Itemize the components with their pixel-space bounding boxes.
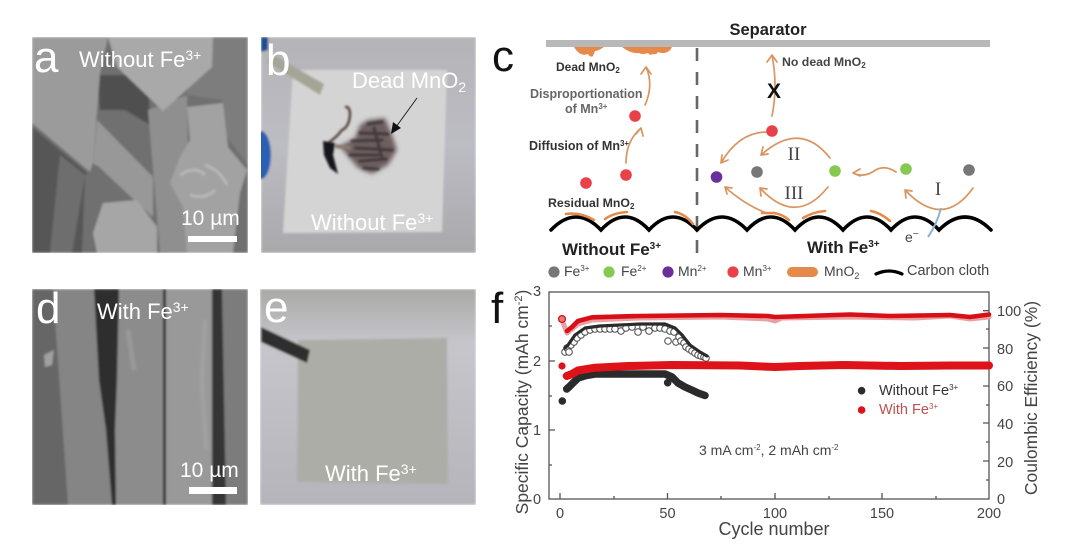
caption a: 3+	[185, 47, 201, 63]
roman numerals: III	[785, 183, 803, 204]
test conditions: 3 mA cm	[699, 442, 753, 458]
caption d: 3+	[173, 299, 189, 315]
test conditions: -2	[753, 443, 761, 452]
roman numerals: II	[788, 144, 800, 165]
right axis ticks: 60	[997, 379, 1013, 395]
arrow to dead MnO2	[391, 98, 417, 134]
series: coulombic efficiency with Fe3+	[559, 314, 989, 333]
chart legend: 3+	[949, 383, 959, 392]
chart legend: 3+	[929, 402, 938, 411]
x axis title: Cycle number	[718, 519, 830, 539]
legend: Mn	[743, 263, 762, 279]
left axis title: -2	[513, 295, 525, 305]
legend: Fe	[564, 263, 580, 279]
label f: f	[491, 284, 504, 333]
series: capacity with Fe3+	[558, 362, 989, 376]
scale text a: 10 µm	[181, 207, 240, 230]
chart legend	[858, 383, 959, 418]
dead MnO2 deposits	[574, 47, 672, 57]
left axis title: )	[512, 290, 532, 295]
legend: 3+	[580, 264, 590, 273]
caption e: 3+	[401, 461, 417, 477]
x axis ticks: 50	[659, 506, 676, 522]
right axis ticks	[997, 304, 1021, 508]
legend: 2+	[637, 264, 647, 273]
panel c: mechanism schematic	[492, 21, 991, 281]
scale bar d	[189, 487, 237, 494]
right axis ticks: 0	[997, 492, 1005, 508]
text: diffusion: Diffusion of Mn	[529, 139, 620, 153]
chart legend: Without Fe	[879, 383, 949, 399]
label d: d	[36, 284, 60, 333]
label c: c	[492, 32, 514, 81]
right axis ticks: 80	[997, 342, 1013, 358]
x axis ticks	[556, 506, 1001, 522]
roman numerals	[785, 144, 941, 204]
legend: 2	[854, 271, 859, 281]
caption d: With Fe	[97, 299, 173, 324]
text: with Fe: 3+	[868, 239, 880, 250]
test conditions: -2	[831, 443, 839, 452]
legend: 3+	[762, 264, 772, 273]
left axis ticks: 1	[533, 423, 541, 439]
label e: e	[264, 283, 288, 332]
legend: Carbon cloth	[907, 263, 989, 279]
text: no dead: No dead MnO	[782, 55, 861, 69]
caption a: Without Fe	[79, 47, 185, 72]
text: diffusion: 3+	[620, 139, 629, 148]
plot frame and ticks	[549, 292, 989, 499]
panel d: SEM image with Fe3+	[32, 284, 248, 505]
panel b: photo of separator with dead MnO2	[251, 36, 476, 253]
caption e: With Fe	[325, 461, 401, 486]
roman numerals: I	[935, 179, 941, 200]
panel a: SEM image without Fe3+	[32, 33, 248, 253]
text: dead MnO2: 2	[615, 66, 620, 75]
arrows	[626, 55, 973, 212]
carbon cloth	[551, 217, 991, 230]
test conditions: , 2 mAh cm	[761, 442, 831, 458]
separator bar	[546, 40, 990, 47]
x axis ticks: 150	[870, 506, 894, 522]
x axis ticks: 100	[763, 506, 787, 522]
legend: 2+	[697, 264, 707, 273]
right axis ticks: 100	[997, 304, 1021, 320]
text: with Fe: With Fe	[807, 238, 868, 257]
caption dead MnO2: Dead MnO	[352, 68, 458, 93]
x axis ticks: 200	[977, 506, 1001, 522]
x axis ticks: 0	[556, 506, 564, 522]
text: disproportionation: Disproportionation	[530, 87, 642, 101]
ions	[580, 110, 975, 189]
left axis ticks: 2	[533, 354, 541, 370]
series: capacity without Fe3+	[558, 374, 705, 405]
text: no dead: 2	[861, 61, 866, 70]
left axis ticks: 3	[533, 284, 541, 300]
panel e: photo of clean separator	[260, 283, 476, 505]
text: residual: Residual MnO	[548, 196, 630, 210]
blocked X: X	[767, 80, 781, 103]
text: without Fe: Without Fe	[562, 240, 650, 259]
panel f: cycling chart	[491, 284, 1041, 539]
legend: MnO	[824, 263, 854, 279]
left axis ticks	[533, 284, 541, 508]
legend: Mn	[678, 263, 697, 279]
left axis title: Specific Capacity (mAh cm	[512, 305, 532, 514]
text: residual: 2	[630, 202, 635, 211]
caption dead MnO2: 2	[458, 79, 466, 95]
right axis ticks: 40	[997, 417, 1013, 433]
label a: a	[34, 33, 59, 82]
legend: Fe	[621, 263, 637, 279]
series: coulombic efficiency without Fe3+	[562, 324, 709, 361]
electron transfer line	[928, 208, 941, 237]
electron label: e	[905, 229, 913, 245]
residual MnO2 on cloth	[566, 211, 890, 224]
text: of Mn3+: of Mn	[565, 102, 598, 116]
caption b: Without Fe	[311, 210, 417, 235]
electron label: −	[913, 229, 919, 240]
right axis ticks: 20	[997, 455, 1013, 471]
scale bar a	[188, 236, 237, 242]
separator title: Separator	[729, 21, 807, 39]
text: dead MnO2: Dead MnO	[556, 60, 615, 74]
legend	[548, 263, 989, 281]
label b: b	[266, 36, 290, 85]
text: of Mn3+: 3+	[598, 102, 608, 111]
text: without Fe: 3+	[650, 241, 661, 252]
caption b: 3+	[417, 210, 433, 226]
scale text d: 10 µm	[180, 459, 239, 482]
left axis ticks: 0	[533, 492, 541, 508]
right axis title: Coulombic Efficiency (%)	[1021, 301, 1041, 495]
divider dashed line	[696, 48, 698, 256]
chart legend: With Fe	[879, 402, 929, 418]
